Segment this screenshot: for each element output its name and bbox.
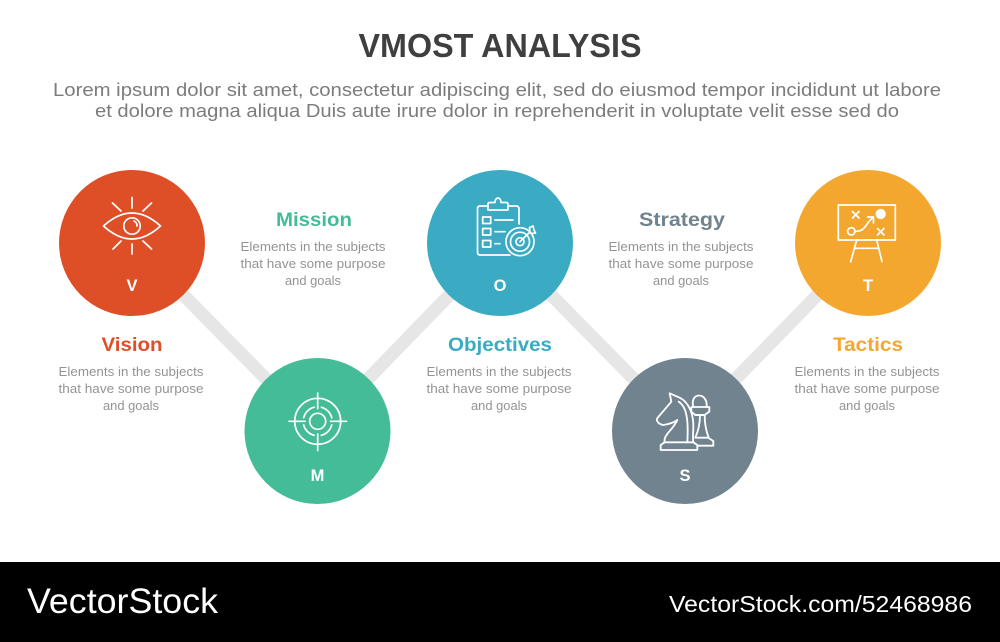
- mission description: [240, 239, 386, 288]
- panel: objectives: [426, 170, 573, 413]
- strategy description: that have some purpose: [608, 256, 754, 271]
- tactics description: [794, 364, 940, 413]
- mission description: that have some purpose: [240, 256, 386, 271]
- icon: chess knight and pawn: [657, 393, 713, 450]
- panel: vision: [58, 170, 205, 413]
- vision description: Elements in the subjects: [58, 364, 204, 379]
- intro text: et dolore magna aliqua Duis aute irure dolor in reprehenderit in voluptate velit esse sed do: [95, 100, 899, 121]
- vision description: [58, 364, 204, 413]
- panel: strategy: [608, 210, 758, 504]
- mission description: Elements in the subjects: [240, 239, 386, 254]
- letter T: T: [863, 277, 873, 295]
- icon: tactics board: [838, 205, 895, 262]
- strategy description: and goals: [653, 273, 709, 288]
- objectives description: [426, 364, 572, 413]
- footer bar: [0, 562, 1000, 642]
- vision circle: [59, 170, 205, 316]
- letter O: O: [494, 277, 507, 295]
- objectives description: that have some purpose: [426, 381, 572, 396]
- icon: clipboard with target: [478, 198, 536, 256]
- mission description: and goals: [285, 273, 341, 288]
- tactics description: Elements in the subjects: [794, 364, 940, 379]
- letter M: M: [311, 467, 324, 485]
- objectives description: and goals: [471, 398, 527, 413]
- letter V: V: [126, 277, 138, 295]
- intro text: Lorem ipsum dolor sit amet, consectetur adipiscing elit, sed do eiusmod tempor incididunt ut labore: [53, 79, 941, 100]
- panel: tactics: [794, 170, 941, 413]
- objectives description: Elements in the subjects: [426, 364, 572, 379]
- mission circle: [244, 358, 390, 504]
- letter S: S: [679, 467, 691, 485]
- strategy description: Elements in the subjects: [608, 239, 754, 254]
- title: VMOST ANALYSIS: [358, 27, 642, 64]
- zigzag connector: [132, 243, 868, 431]
- footer logo: VectorStock: [27, 582, 219, 621]
- tactics heading: Tactics: [833, 335, 903, 356]
- objectives heading: Objectives: [448, 335, 552, 356]
- tactics circle: [795, 170, 941, 316]
- tactics description: that have some purpose: [794, 381, 940, 396]
- strategy description: [608, 239, 754, 288]
- strategy circle: [612, 358, 758, 504]
- strategy heading: Strategy: [639, 210, 725, 231]
- mission heading: Mission: [276, 210, 352, 231]
- vision description: that have some purpose: [58, 381, 204, 396]
- vision description: and goals: [103, 398, 159, 413]
- vision heading: Vision: [102, 335, 162, 356]
- panel: mission: [240, 210, 390, 504]
- objectives circle: [427, 170, 573, 316]
- footer image id: VectorStock.com/52468986: [669, 591, 972, 617]
- icon: eye: [104, 198, 160, 254]
- icon: crosshair target: [289, 393, 346, 450]
- tactics description: and goals: [839, 398, 895, 413]
- intro text: [53, 79, 941, 121]
